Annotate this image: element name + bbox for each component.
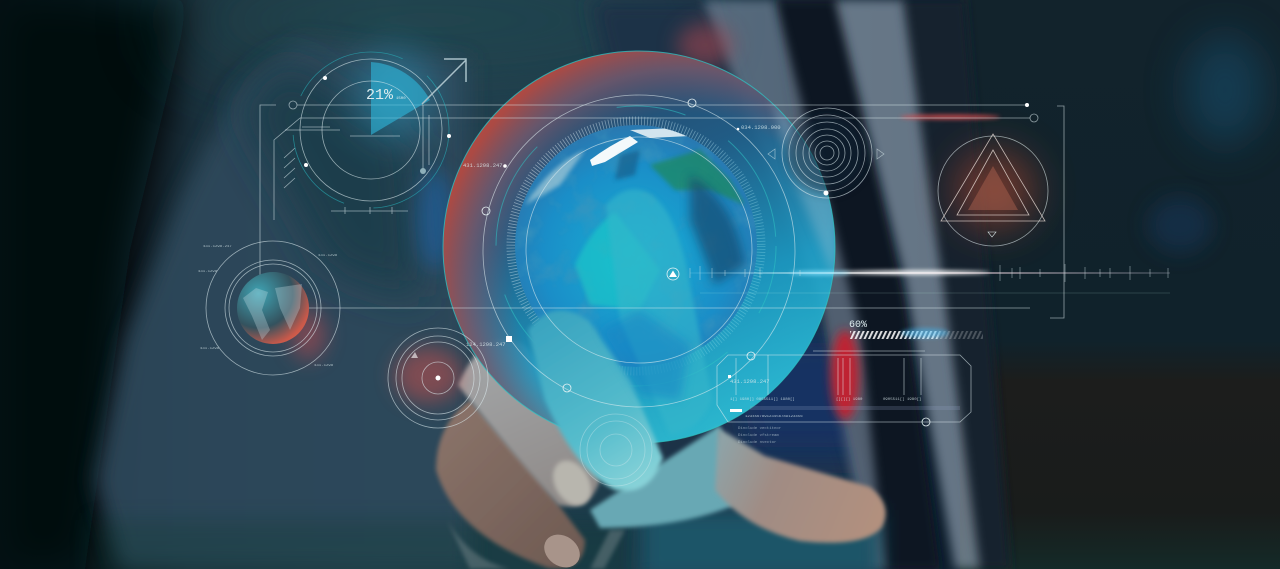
bottom tint <box>640 510 880 569</box>
hand <box>436 340 886 569</box>
thumb <box>715 428 886 543</box>
gauge: 21% <box>285 52 466 214</box>
suit arm <box>95 40 470 569</box>
mini globe: 431.1298 <box>314 364 334 368</box>
mini globe: 431.1298.247 <box>203 245 232 249</box>
list: Dinclude vectitnor <box>738 426 782 431</box>
hologram disc <box>443 51 840 443</box>
data panel: Dinclude vfstream <box>738 433 779 438</box>
data panel: Dinclude nvector <box>738 440 777 445</box>
gauge value: 21% <box>366 87 394 104</box>
finger rings <box>580 414 652 486</box>
gauge: 21%: 1500 <box>396 97 406 101</box>
data panel: 0905511[] 1980[] <box>883 397 921 402</box>
target rings <box>388 328 488 428</box>
jacket centre <box>590 0 880 569</box>
shirt stripes <box>703 0 885 569</box>
main rings: 124.1298.247 <box>466 341 506 348</box>
triangle badge <box>938 134 1048 246</box>
knuckle finger <box>458 340 600 506</box>
earth <box>515 125 757 367</box>
right suit <box>960 0 1280 569</box>
flares <box>955 150 1035 230</box>
main rings: 034.1298.900 <box>741 124 781 131</box>
data panel <box>717 351 971 445</box>
coordinate labels: 431.1298.247 <box>463 162 503 169</box>
mini globe: 431.1298 <box>198 270 218 274</box>
lapel right <box>900 0 1010 569</box>
nail lower <box>538 528 586 569</box>
shoulder tint <box>170 0 690 80</box>
index finger <box>528 189 712 491</box>
mini globe: 431.1298 <box>200 347 220 351</box>
main rings <box>463 95 795 407</box>
nail middle <box>545 454 599 512</box>
data panel: 1[] 1980[] 0855511[] 1980[] <box>730 397 795 402</box>
cuff <box>447 520 625 569</box>
arrow <box>422 59 466 104</box>
frame <box>260 101 1064 318</box>
concentric target <box>768 108 884 198</box>
data panel: 123456789123456789123456 <box>745 415 803 419</box>
waveform <box>690 264 1170 293</box>
fist lower finger <box>436 400 585 568</box>
mini globe: 431.1298 <box>318 254 338 258</box>
main rings: 431.1298.247 <box>730 378 770 385</box>
data panel: [][][] 1980 <box>836 397 863 402</box>
progress: 60%: 60% <box>849 320 867 331</box>
mini globe <box>198 241 340 375</box>
palm <box>590 425 735 528</box>
tie <box>775 0 940 569</box>
upper-left darkness <box>0 0 190 569</box>
progress: 60% <box>849 320 983 339</box>
